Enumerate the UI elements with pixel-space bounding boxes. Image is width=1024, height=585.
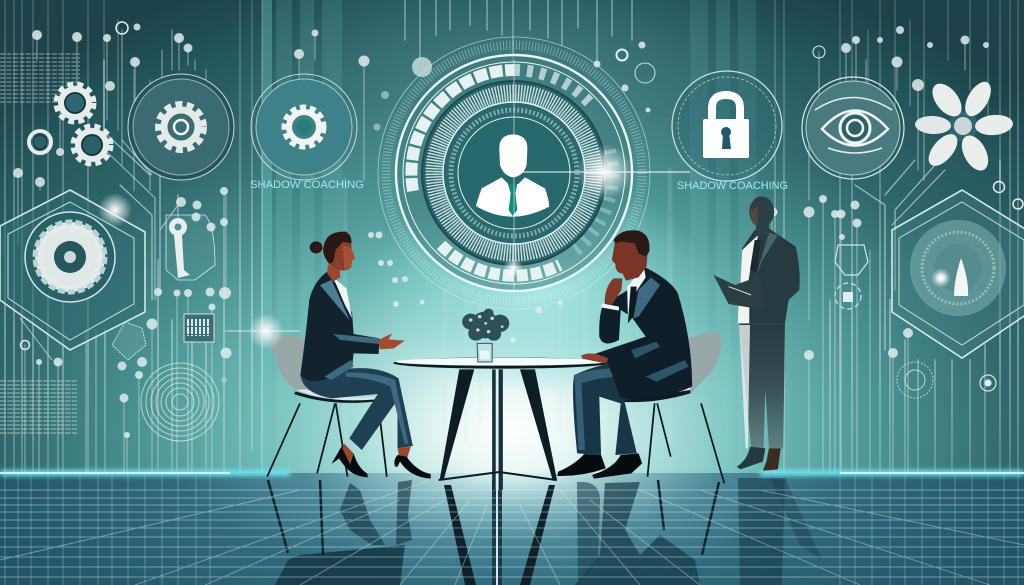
woman seated <box>300 232 431 479</box>
eye circle <box>802 77 904 179</box>
gear <box>73 126 111 164</box>
outer thin rings <box>378 37 650 309</box>
central ring graphic <box>378 37 650 309</box>
barcode box <box>184 314 214 342</box>
floor <box>0 470 1024 585</box>
engraved badge <box>112 322 146 360</box>
lens flares <box>98 60 951 349</box>
person icon <box>476 134 549 217</box>
heading left: SHADOW COACHING <box>250 179 364 191</box>
floor reflections <box>275 478 822 585</box>
heading right: SHADOW COACHING <box>677 180 788 192</box>
data block top left <box>0 54 80 102</box>
fingerprint circle <box>141 363 219 441</box>
icon: eye <box>815 98 892 153</box>
circuit nodes <box>13 22 1023 438</box>
icon: padlock <box>703 95 749 158</box>
horizon glow <box>0 470 1024 476</box>
round table <box>393 357 609 490</box>
light bands behind figures <box>214 0 814 470</box>
left chair <box>267 335 387 477</box>
segmented band <box>411 70 613 276</box>
gear circle two <box>251 74 357 180</box>
small gear <box>29 131 51 153</box>
man seated <box>557 230 692 479</box>
vase with plant <box>462 309 509 362</box>
figures and furniture <box>267 196 800 490</box>
data block bottom left <box>0 381 77 433</box>
flower icon <box>915 78 1014 175</box>
standing observer <box>714 196 800 471</box>
floor grid <box>0 480 1024 585</box>
right chair <box>624 332 724 483</box>
gear circle one <box>128 74 234 180</box>
table and chair reflections <box>268 480 719 585</box>
left cog cluster <box>0 54 357 180</box>
key icon <box>166 215 215 280</box>
right minor badges <box>835 245 996 398</box>
hexagon right <box>892 190 1024 358</box>
hatched ring <box>434 93 594 253</box>
hexagon left with dial <box>0 140 155 360</box>
gear <box>56 84 94 122</box>
lock circle <box>672 71 782 181</box>
